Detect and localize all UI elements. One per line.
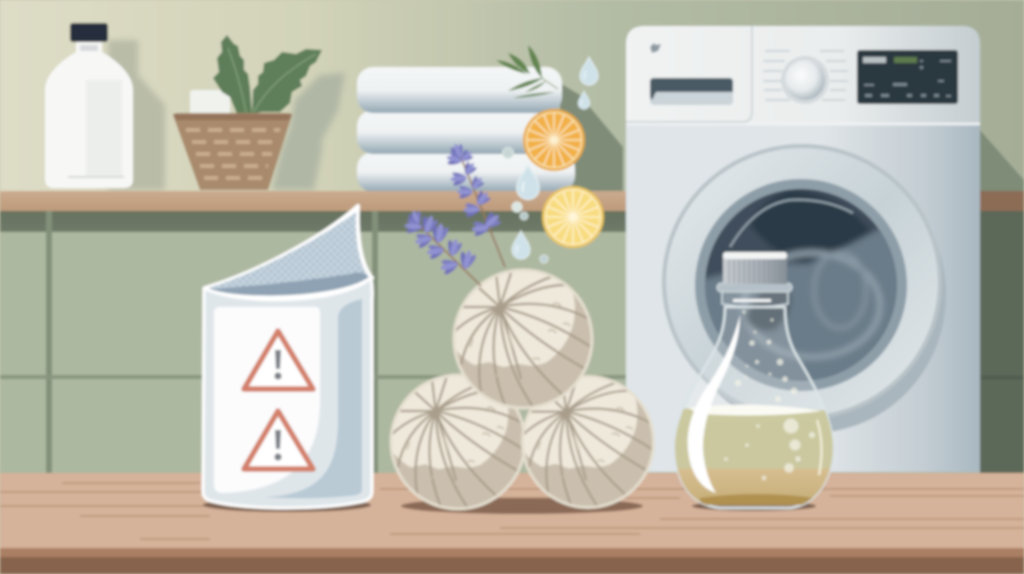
lavender sprigs [404,141,505,286]
wall [0,0,1024,195]
bottle neck [722,290,788,307]
lemon slice [542,186,604,248]
folded towels [357,67,575,192]
potted plant [173,35,322,190]
glass bottle with oil [670,252,840,511]
shadow under balls [401,498,643,514]
water drops [502,57,598,263]
right ball [510,352,659,521]
side shade [264,299,362,498]
bottle cap [723,252,787,284]
control panel [626,26,980,124]
dial ticks [763,51,848,100]
glass highlight [688,315,740,493]
wooden table [0,473,1024,574]
digital display [857,50,958,104]
door [662,144,946,433]
left ball [378,350,531,523]
dotted inner liner [205,206,372,297]
herb sprig [496,45,558,98]
plant shadow on wall [272,73,345,190]
glass body [675,307,833,508]
dial knob [781,56,829,104]
cup body [203,278,372,508]
bottle shadow on wall [108,40,165,190]
shadowed area right of washer [980,130,1024,476]
washing machine [626,26,980,472]
cup shadow [203,498,371,512]
wool dryer balls [378,244,659,523]
detergent drawer [626,26,752,122]
warning triangle 1 [244,331,313,389]
neck flange [717,283,792,292]
green tiles [0,205,1024,480]
warning triangle 2 [244,411,313,469]
top ball [441,244,598,422]
drum [704,188,898,382]
orange slice [523,109,585,171]
white storage bottle [45,23,133,188]
shelf [0,191,1024,211]
bottle shadow [692,501,816,511]
white label [214,307,320,493]
liquid [670,405,840,505]
towel shadow [560,83,623,192]
warning-labelled cup [203,206,372,512]
bubbles [724,310,815,480]
